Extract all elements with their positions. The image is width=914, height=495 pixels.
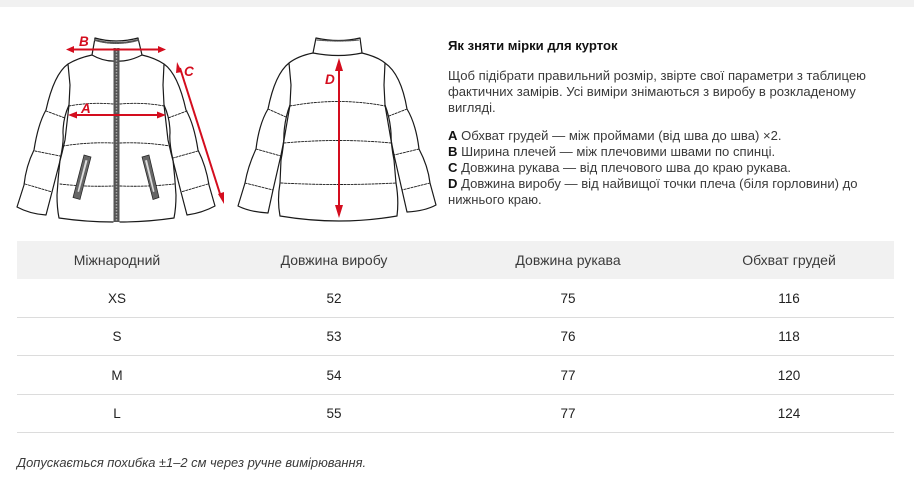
row S: 53 [326, 329, 342, 344]
row S: S [112, 329, 122, 344]
row L: 124 [778, 406, 800, 421]
row XS [17, 291, 894, 318]
row L [17, 406, 894, 433]
row XS: 52 [326, 291, 342, 306]
row M [17, 368, 894, 395]
row XS: 75 [560, 291, 576, 306]
arrow B [66, 34, 166, 53]
text: вигляді. [448, 100, 496, 115]
heading: Як зняти мірки для курток [448, 38, 618, 53]
row XS: XS [108, 291, 126, 306]
top band [0, 0, 914, 7]
text block: measurement legend [448, 128, 858, 207]
row S [17, 329, 894, 356]
zipper [114, 48, 120, 222]
arrow A: A [80, 101, 91, 116]
pockets [73, 155, 159, 200]
text: B Ширина плечей — між плечовими швами по спинці. [448, 144, 775, 159]
arrow B: B [79, 34, 89, 49]
size table: Довжина виробу [281, 252, 387, 268]
row M: 54 [326, 368, 342, 383]
row M: M [111, 368, 123, 383]
jacket front [17, 38, 215, 222]
size table [17, 241, 894, 433]
arrow A [68, 101, 166, 118]
size table: Міжнародний [74, 252, 160, 268]
text: нижнього краю. [448, 192, 542, 207]
row L: 77 [560, 406, 576, 421]
arrow D: D [325, 72, 335, 87]
text: A Обхват грудей — між проймами (від шва до шва) ×2. [448, 128, 782, 143]
size table: Довжина рукава [515, 252, 621, 268]
text: фактичних замірів. Усі виміри знімаються з виробу в розкладеному [448, 84, 856, 99]
arrow D [325, 58, 343, 218]
text: C Довжина рукава — від плечового шва до краю рукава. [448, 160, 791, 175]
row XS: 116 [778, 291, 800, 306]
size table: Обхват грудей [742, 252, 836, 268]
jacket back [238, 38, 436, 221]
row S: 76 [560, 329, 576, 344]
row M: 77 [560, 368, 576, 383]
text: D Довжина виробу — від найвищої точки плеча (біля горловини) до [448, 176, 858, 191]
footnote: Допускається похибка ±1–2 см через ручне вимірювання. [17, 455, 366, 470]
row M: 120 [778, 368, 800, 383]
table header [17, 241, 894, 279]
diagram: jacket front and back [16, 34, 437, 223]
arrow C: C [184, 64, 194, 79]
row L: L [113, 406, 121, 421]
text: Щоб підібрати правильний розмір, звірте свої параметри з таблицею [448, 68, 866, 83]
row L: 55 [326, 406, 342, 421]
row S: 118 [778, 329, 800, 344]
arrow C [176, 62, 224, 204]
text block: intro [448, 68, 866, 115]
